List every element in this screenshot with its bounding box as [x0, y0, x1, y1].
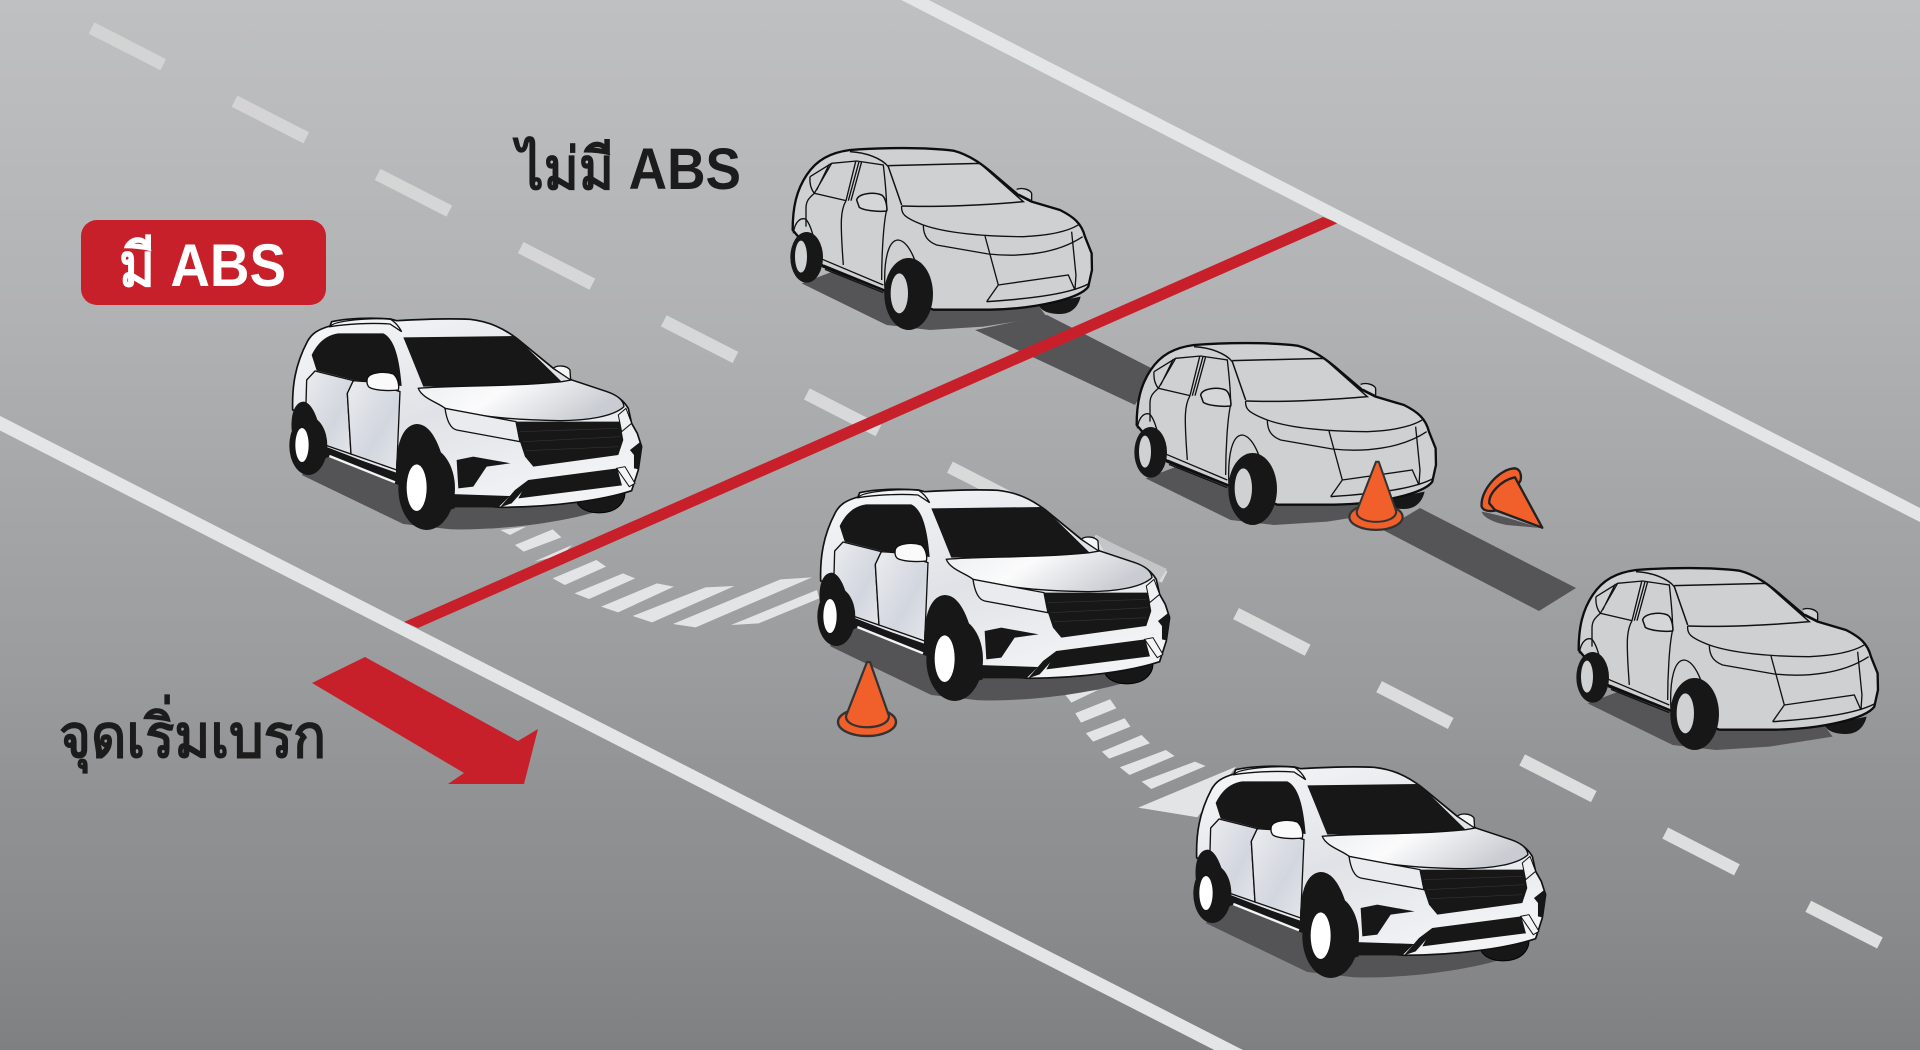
skid mark: lane wedge behind middle car: [1095, 535, 1167, 583]
badge: with ABS: [81, 220, 326, 305]
cone: in front of grey car: [1349, 462, 1403, 530]
red braking start line: [404, 217, 1338, 628]
straight skid mark: non-ABS car, second segment: [1383, 508, 1576, 611]
label: no ABS: ไม่มี ABS: [511, 136, 741, 202]
white car: ABS, final: [1193, 766, 1546, 978]
skid marks: ABS car steering around first cone: [500, 527, 819, 627]
grey car: no ABS, final: [1576, 568, 1878, 750]
label: brake start point: จุดเริ่มเบรก: [59, 694, 326, 774]
white car: ABS, start: [289, 318, 642, 530]
grey car: no ABS, middle: [1134, 343, 1436, 525]
road edge line bottom: [0, 413, 1260, 1050]
cone: knocked over: [1482, 468, 1542, 528]
straight skid mark: non-ABS car, first segment: [975, 315, 1155, 405]
red arrow: travel direction: [312, 657, 538, 784]
badge: with ABS: มี ABS: [119, 232, 286, 299]
white car: ABS, middle: [817, 489, 1170, 701]
cone: beside ABS car: [838, 662, 896, 736]
grey car: no ABS, start: [790, 148, 1092, 330]
skid marks: ABS car steering to final position: [1064, 690, 1236, 817]
road edge line top: [896, 0, 1920, 525]
